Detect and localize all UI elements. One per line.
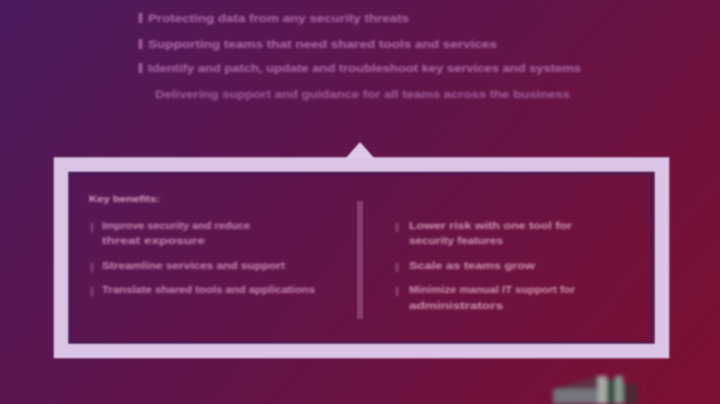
bullet line 2: Supporting teams that need shared tools and services [148,39,497,51]
panel: key benefits frame [61,142,662,351]
panel border [61,164,662,351]
right column list: Lower risk with one tool for [409,221,572,232]
right column list: Scale as teams grow [409,261,535,272]
left column list: Translate shared tools and applications [102,285,315,296]
text block: top bullet list [139,13,581,101]
bullet line 1: Protecting data from any security threats [148,13,409,25]
bullet line 4: Delivering support and guidance for all teams across the business [155,89,570,101]
right column list [396,221,575,312]
icon: device at bottom right [553,376,637,404]
right column list: security features [409,236,504,247]
panel inner shadow [69,173,652,343]
column divider [357,201,363,319]
left column list: Improve security and reduce [102,221,250,232]
left column list: Streamline services and support [102,261,286,272]
heading: Key benefits: [89,194,160,205]
left column list: threat exposure [102,236,206,247]
bullet line 3: Identify and patch, update and troubleshoot key services and systems [148,63,581,75]
right column list: administrators [409,301,504,312]
right column list: Minimize manual IT support for [409,285,575,296]
left column list [91,221,315,296]
pointer arrow [345,142,375,159]
